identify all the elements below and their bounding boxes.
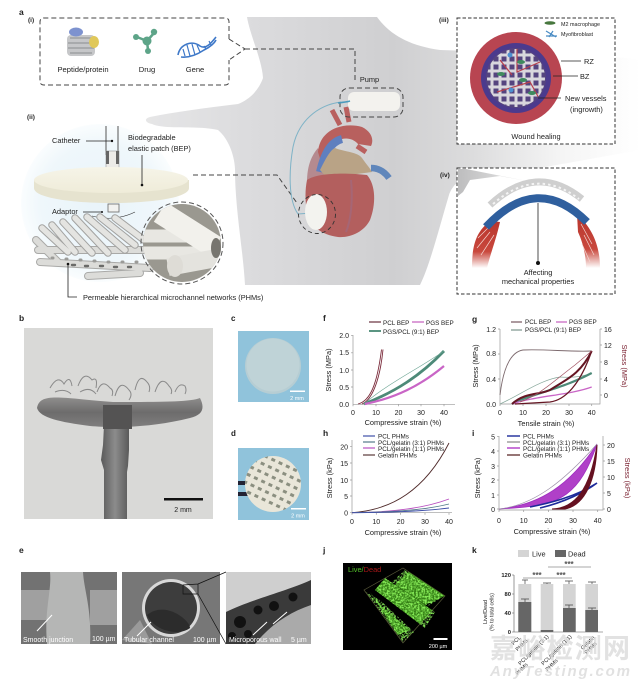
chart f: compressive stress BEP: 30 xyxy=(417,410,425,417)
chart f: compressive stress BEP: f xyxy=(323,313,326,323)
panel j: live/dead 3D image: j xyxy=(322,545,325,555)
right tick labels: 16 xyxy=(604,327,612,334)
blue catheter line xyxy=(290,102,341,214)
SEM: microporous wall: 5 µm xyxy=(291,637,307,644)
chart g: tensile stress BEP: Tensile strain (%) xyxy=(518,419,574,428)
chart g: tensile stress BEP: 40 xyxy=(588,410,596,417)
legend: Myofibroblast xyxy=(561,32,594,38)
tick labels: 1.5 xyxy=(339,350,349,357)
pump xyxy=(338,75,403,117)
tick labels xyxy=(501,573,511,636)
tick labels: 4 xyxy=(491,449,495,456)
green cell scaffold xyxy=(364,568,445,643)
axes xyxy=(512,575,603,632)
chart i: cyclic compressive PHMs xyxy=(472,428,632,536)
chart f: compressive stress BEP: 40 xyxy=(440,410,448,417)
microchannel lattice xyxy=(36,217,150,276)
tick labels: 5 xyxy=(491,434,495,442)
right tick labels: 20 xyxy=(607,443,615,450)
red myocardium left xyxy=(472,221,500,268)
chart i: cyclic compressive PHMs: i xyxy=(472,428,474,438)
implanted patch with dashed circle xyxy=(298,194,336,234)
axes xyxy=(498,329,602,406)
tick labels: 0 xyxy=(491,507,495,514)
chart g: tensile stress BEP: Stress (MPa) xyxy=(620,344,629,388)
significance brackets: *** xyxy=(556,571,567,580)
wound disc with grid xyxy=(470,32,562,124)
axes xyxy=(497,436,605,512)
scale bar: 2 mm xyxy=(291,514,305,520)
chart f: compressive stress BEP: 0 xyxy=(351,410,355,417)
cargo labels: Gene xyxy=(186,65,204,74)
watermark: AnyTesting.com xyxy=(489,663,630,680)
tick labels xyxy=(339,333,349,409)
chart g: tensile stress BEP: 0 xyxy=(498,410,502,417)
heart illustration xyxy=(306,107,389,237)
chart i: cyclic compressive PHMs: 0 xyxy=(497,518,501,525)
dead bars xyxy=(518,602,598,632)
legend: Gelatin PHMs xyxy=(378,452,417,460)
scale bar: 200 µm xyxy=(429,644,448,650)
category labels: PHMs xyxy=(515,662,530,677)
live bars xyxy=(518,584,598,632)
callouts RZ BZ vessels: RZ xyxy=(584,57,594,66)
chart h: compressive PHMs xyxy=(323,428,453,537)
tick labels: 1.2 xyxy=(486,327,496,334)
category labels: PCL/gelatin (3:1) xyxy=(518,634,551,667)
BEP label xyxy=(128,133,191,153)
SEM: smooth junction: Smooth junction xyxy=(23,637,73,644)
leader and caption xyxy=(502,203,574,286)
sub-panel (iv): mechanical properties xyxy=(440,168,615,294)
leader and caption: Affecting xyxy=(524,268,552,277)
PHM label with leader xyxy=(67,263,263,302)
magnified tube inset xyxy=(140,202,223,284)
legend: PCL BEP xyxy=(383,320,409,327)
dashed leader from patch to heart xyxy=(193,175,297,203)
tick labels: 1.0 xyxy=(339,368,349,375)
panel b: CT image of device: b xyxy=(19,313,24,323)
chart h: compressive PHMs: Compressive strain (%) xyxy=(365,528,441,537)
category labels: PHMs xyxy=(584,641,599,656)
legend: Live xyxy=(532,550,546,558)
legend: PCL/gelatin (1:1) PHMs xyxy=(378,446,444,453)
legend: Gelatin PHMs xyxy=(523,452,562,460)
chart f: compressive stress BEP: Compressive strain (%) xyxy=(365,418,441,427)
tick labels: 40 xyxy=(505,611,511,617)
axis titles: Stress (kPa) xyxy=(473,458,482,498)
SEM: tubular channel xyxy=(122,572,226,644)
chart f: compressive stress BEP xyxy=(323,313,455,427)
legend xyxy=(544,21,600,38)
panel e: SEM images xyxy=(19,545,311,644)
right tick labels xyxy=(607,443,615,514)
sub-panel (iii): wound healing xyxy=(439,17,615,144)
y axis title xyxy=(483,593,496,631)
grey cone to heart xyxy=(458,169,532,196)
chart k: live dead bars xyxy=(472,545,603,677)
caption: Wound healing xyxy=(511,132,561,141)
legend xyxy=(507,434,589,460)
SEM: microporous wall xyxy=(226,572,311,644)
tick labels: 0 xyxy=(508,630,511,636)
scale bar: 2 mm xyxy=(174,507,192,514)
red myocardium right xyxy=(577,214,600,268)
catheter: Catheter xyxy=(52,136,81,145)
category labels: PHMs xyxy=(515,638,530,653)
catheter xyxy=(52,126,119,174)
curves xyxy=(500,350,592,404)
right tick labels: 4 xyxy=(604,377,608,384)
chart h: compressive PHMs: 40 xyxy=(445,519,453,526)
significance brackets xyxy=(523,560,591,580)
SEM: smooth junction: 100 µm xyxy=(92,636,116,643)
legend: PCL/gelatin (3:1) PHMs xyxy=(378,440,444,447)
tick labels: 2.0 xyxy=(339,333,349,340)
right tick labels: 0 xyxy=(607,507,611,514)
significance brackets: *** xyxy=(532,571,543,580)
aortic arch xyxy=(318,125,372,165)
callouts RZ BZ vessels: (ingrowth) xyxy=(570,105,603,114)
right tick labels xyxy=(604,327,612,400)
chart f: compressive stress BEP: 10 xyxy=(372,410,380,417)
dashed leader from (i) to pump xyxy=(229,39,355,80)
tick labels: 0.4 xyxy=(486,377,496,384)
callouts RZ BZ vessels: BZ xyxy=(580,72,590,81)
legend xyxy=(363,434,444,460)
cargo labels: Drug xyxy=(139,65,155,74)
tick labels: 80 xyxy=(505,592,511,598)
disc with stem xyxy=(37,376,203,519)
tick labels: 1 xyxy=(491,493,495,500)
sub-panel (iv): mechanical properties: (iv) xyxy=(440,172,450,179)
axes xyxy=(350,440,452,515)
chart h: compressive PHMs: h xyxy=(323,428,328,438)
watermark: 嘉峪检测网 xyxy=(490,634,630,664)
category labels xyxy=(511,634,599,677)
error bars xyxy=(521,580,596,610)
right tick labels: 12 xyxy=(604,343,612,350)
legend xyxy=(518,550,586,558)
blue glow behind device xyxy=(21,124,179,282)
panel d: PHM photo xyxy=(231,429,309,520)
legend: PCL BEP xyxy=(525,319,551,326)
legend: M2 macrophage xyxy=(561,22,600,28)
chart h: compressive PHMs: 20 xyxy=(397,519,405,526)
axis titles: Stress (kPa) xyxy=(325,458,334,498)
tick labels: 0.0 xyxy=(486,402,496,409)
right tick labels: 15 xyxy=(607,459,615,466)
icon: drug molecule xyxy=(133,29,157,54)
panel: a overall schematic xyxy=(19,7,640,302)
chart g: tensile stress BEP: 30 xyxy=(565,410,573,417)
legend: PGS/PCL (9:1) BEP xyxy=(383,329,439,336)
scale bar: 2 mm xyxy=(290,396,304,402)
tick labels: 5 xyxy=(344,494,348,501)
legend: PCL/gelatin (1:1) PHMs xyxy=(523,446,589,453)
curves xyxy=(352,443,449,513)
human body silhouette xyxy=(146,17,640,285)
curves xyxy=(358,350,444,404)
chart i: cyclic compressive PHMs: 40 xyxy=(594,518,602,525)
tick labels: 15 xyxy=(340,461,348,468)
legend: PCL PHMs xyxy=(523,434,554,440)
panel j: live/dead 3D image xyxy=(322,545,452,650)
tick labels: 20 xyxy=(340,444,348,452)
right tick labels: 5 xyxy=(607,491,611,498)
elastic patch disk xyxy=(34,155,189,203)
panel d: PHM photo: d xyxy=(231,429,236,438)
legend: PGS/PCL (9:1) BEP xyxy=(525,327,581,334)
sub-panel (ii): patch device: (ii) xyxy=(27,114,35,121)
panel label a: a xyxy=(19,7,24,17)
sub-panel (i): cargo box: (i) xyxy=(28,17,34,24)
legend: PCL PHMs xyxy=(378,434,409,440)
panel c: patch photo xyxy=(231,314,309,402)
cargo labels: Peptide/protein xyxy=(57,65,109,74)
legend xyxy=(511,319,597,334)
legend: PGS BEP xyxy=(569,319,597,326)
SEM: tubular channel: Tubular channel xyxy=(124,637,174,644)
chart i: cyclic compressive PHMs: Compressive strain (%) xyxy=(514,527,590,536)
tick labels: 0 xyxy=(344,510,348,518)
tick labels xyxy=(340,444,348,518)
cargo labels xyxy=(57,65,204,74)
chart g: tensile stress BEP: 10 xyxy=(519,410,527,417)
adaptor: Adaptor xyxy=(52,207,78,216)
category labels: Gelatin xyxy=(580,635,596,652)
axis titles: Stress (MPa) xyxy=(471,344,480,388)
axes xyxy=(351,335,455,406)
tick labels: 0.8 xyxy=(486,351,496,358)
tick labels xyxy=(486,327,496,409)
legend: Dead xyxy=(568,550,586,558)
callouts RZ BZ vessels xyxy=(538,57,607,114)
scale bar xyxy=(164,498,203,514)
SEM: microporous wall: Microporous wall xyxy=(229,637,282,644)
chart g: tensile stress BEP: 20 xyxy=(542,410,550,417)
sub-panel (ii): patch device xyxy=(21,114,263,302)
watermark xyxy=(489,634,630,680)
blue vein xyxy=(320,139,342,172)
legend xyxy=(369,320,454,336)
pump: Pump xyxy=(360,75,379,84)
BEP label: elastic patch (BEP) xyxy=(128,144,191,153)
beige atrium xyxy=(320,148,372,178)
chart f: compressive stress BEP: 20 xyxy=(395,410,402,417)
category labels: PCL/gelatin (1:1) xyxy=(541,634,574,667)
tick labels: 3 xyxy=(491,464,495,471)
axis titles: Stress (MPa) xyxy=(324,348,333,392)
right tick labels: 10 xyxy=(607,475,615,482)
chart h: compressive PHMs: 10 xyxy=(372,519,380,526)
sub-panel (i): cargo box xyxy=(28,17,229,85)
chart g: tensile stress BEP: g xyxy=(472,314,477,324)
panel c: patch photo: c xyxy=(231,314,236,323)
SEM: tubular channel: 100 µm xyxy=(193,637,217,644)
y axis title: Live/Dead xyxy=(483,600,489,624)
ventricle xyxy=(306,174,374,237)
right tick labels: 0 xyxy=(604,393,608,400)
tick labels: 0.0 xyxy=(339,402,349,409)
chart h: compressive PHMs: 0 xyxy=(350,519,354,526)
left atrium xyxy=(307,148,328,182)
panel b: CT image of device xyxy=(19,313,213,519)
blue scar tissue arc xyxy=(486,198,587,227)
significance brackets: *** xyxy=(564,560,575,569)
chart h: compressive PHMs: 30 xyxy=(421,519,429,526)
chart g: tensile stress BEP xyxy=(471,314,629,428)
icon: DNA gene xyxy=(178,37,216,57)
chart k: live dead bars: k xyxy=(472,545,477,555)
category labels: PCL xyxy=(511,635,522,647)
sub-panel (iii): wound healing: (iii) xyxy=(439,17,449,24)
legend: PCL/gelatin (3:1) PHMs xyxy=(523,440,589,447)
tick labels: 2 xyxy=(491,478,495,485)
icon: protein xyxy=(67,28,99,56)
SEM: smooth junction xyxy=(21,572,117,644)
great vessels xyxy=(332,107,366,152)
right tick labels: 8 xyxy=(604,360,608,367)
chart i: cyclic compressive PHMs: 10 xyxy=(520,518,528,525)
chart i: cyclic compressive PHMs: 30 xyxy=(569,518,577,525)
BEP label: Biodegradable xyxy=(128,133,176,142)
y axis title: (% to total cells) xyxy=(490,593,496,631)
category labels: PHMs xyxy=(545,658,560,673)
adaptor xyxy=(52,204,135,218)
tick labels: 0.5 xyxy=(339,385,349,392)
callouts RZ BZ vessels: New vessels xyxy=(565,94,607,103)
tick labels: 10 xyxy=(340,478,348,485)
chart i: cyclic compressive PHMs: 20 xyxy=(545,518,552,525)
chart i: cyclic compressive PHMs: Stress (kPa) xyxy=(623,458,632,498)
leader and caption: mechanical properties xyxy=(502,277,574,286)
tick labels xyxy=(491,434,495,514)
tick labels: 120 xyxy=(501,573,511,579)
live/dead label: Live/Dead xyxy=(348,565,381,574)
legend: PGS BEP xyxy=(426,320,454,327)
panel e: SEM images: e xyxy=(19,545,24,555)
grey patch arc xyxy=(490,182,582,205)
PHM label with leader: Permeable hierarchical microchannel networks (PHMs) xyxy=(83,293,263,302)
curves xyxy=(499,444,597,509)
right blue vein xyxy=(371,168,389,178)
